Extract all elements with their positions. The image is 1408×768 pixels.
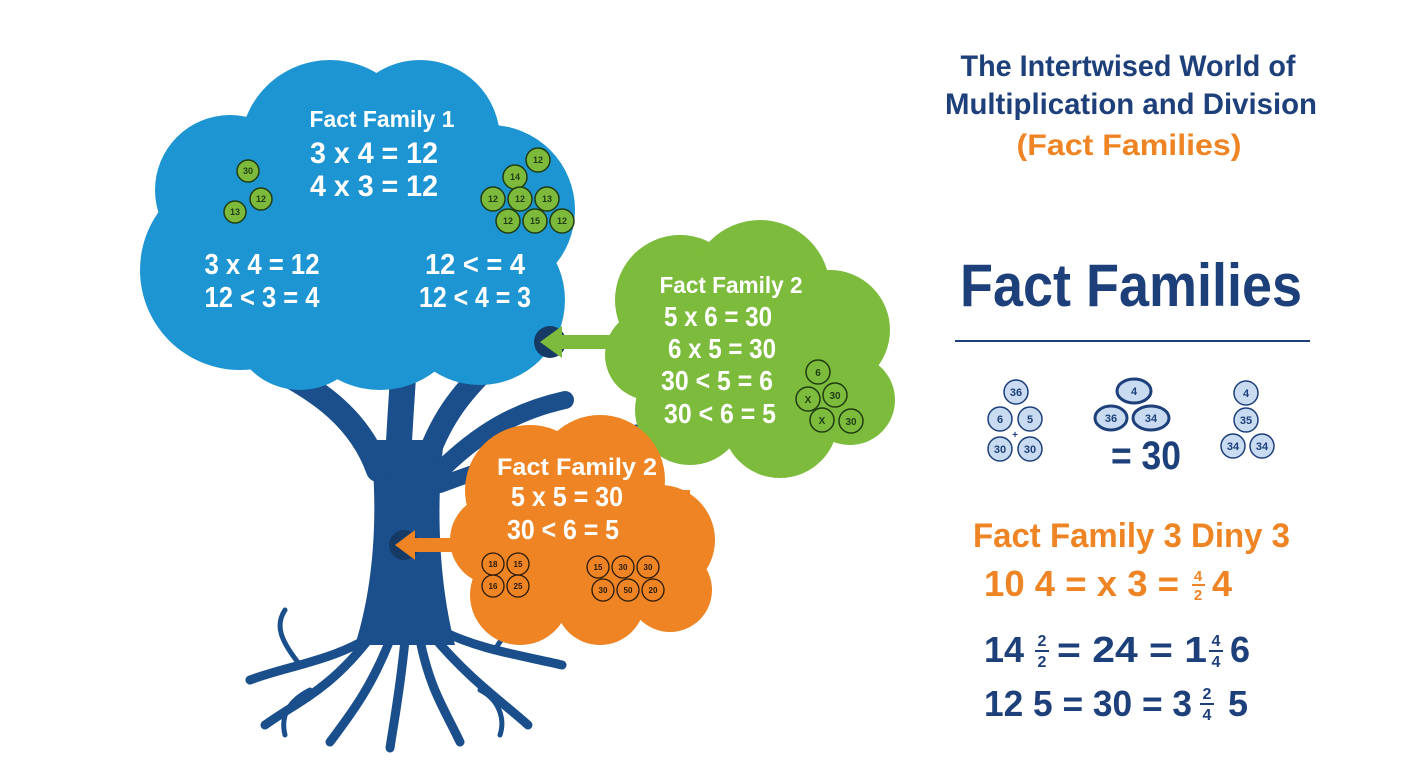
icon: counters orange: 50 bbox=[624, 586, 633, 595]
icon: counter groups: 36 bbox=[1105, 413, 1117, 425]
branches bbox=[268, 360, 640, 485]
equation rows: 2 bbox=[1038, 654, 1047, 671]
icon: counters green cloud bbox=[796, 360, 863, 433]
icon: counters orange: 30 bbox=[644, 563, 653, 572]
icon: counter groups: 34 bbox=[1256, 441, 1269, 453]
icon: green counters right bbox=[481, 148, 574, 233]
icon: counters green cloud: 30 bbox=[829, 391, 841, 402]
text: fact family 2 green: 5 x 6 = 30 bbox=[664, 301, 772, 332]
icon: counters orange: 15 bbox=[594, 563, 603, 572]
text: fact family 2 green: 30 < 5 = 6 bbox=[661, 365, 773, 396]
icon: counter groups: 4 bbox=[1243, 388, 1250, 400]
title bbox=[945, 50, 1317, 162]
text: fact family 1: 3 x 4 = 12 bbox=[204, 249, 320, 281]
cloud: blue fact family 1 bbox=[140, 60, 575, 390]
icon: green counters left: 30 bbox=[243, 166, 253, 176]
icon: counter groups: 6 bbox=[997, 414, 1003, 426]
text: fact family 1: 3 x 4 = 12 bbox=[310, 137, 438, 170]
text: = 30: = 30 bbox=[1111, 434, 1181, 478]
title: (Fact Families) bbox=[1016, 129, 1242, 162]
icon: counter groups: 5 bbox=[1027, 414, 1033, 426]
icon: counter groups: + bbox=[1012, 430, 1018, 441]
icon: counters orange: 18 bbox=[489, 560, 498, 569]
title: The Intertwised World of bbox=[960, 50, 1296, 83]
icon: green counters right: 12 bbox=[533, 155, 543, 165]
roots bbox=[250, 610, 562, 748]
icon: counter groups: 30 bbox=[1024, 444, 1036, 456]
tree bbox=[250, 360, 640, 748]
equation rows: 2 bbox=[1038, 633, 1047, 650]
equation rows: 4 bbox=[1212, 563, 1232, 604]
text: fact family 2 orange: 30 < 6 = 5 bbox=[507, 514, 619, 545]
equation rows: 4 bbox=[1212, 633, 1221, 650]
icon: counters orange: 20 bbox=[649, 586, 658, 595]
icon: counters orange: 30 bbox=[599, 586, 608, 595]
equation rows: = 24 = 1 bbox=[1057, 629, 1207, 670]
equation rows: 2 bbox=[1203, 686, 1212, 703]
text: fact family 2 orange bbox=[497, 454, 657, 545]
equation rows: 4 bbox=[1212, 654, 1221, 671]
equation rows: 5 bbox=[1228, 683, 1248, 724]
icon: green counters left bbox=[224, 160, 272, 223]
icon: green counters left: 13 bbox=[230, 207, 240, 217]
equation rows: 4 bbox=[1194, 568, 1203, 585]
icon: green counters right: 12 bbox=[488, 194, 498, 204]
icon: green counters right: 14 bbox=[510, 172, 520, 182]
icon: counters green cloud: 6 bbox=[815, 368, 821, 379]
icon: counters orange: 16 bbox=[489, 582, 498, 591]
icon: counters green cloud: 30 bbox=[845, 417, 857, 428]
icon: counters orange: 25 bbox=[514, 582, 523, 591]
icon: counters orange: 15 bbox=[514, 560, 523, 569]
icon: counters orange: 30 bbox=[619, 563, 628, 572]
text: fact family 2 green bbox=[660, 272, 802, 429]
icon: counters green cloud: X bbox=[805, 395, 812, 406]
equation rows: 6 bbox=[1230, 629, 1250, 670]
arrow: orange to trunk bbox=[389, 530, 480, 560]
icon: counter groups: 4 bbox=[1131, 386, 1138, 398]
icon: green counters right: 12 bbox=[503, 216, 513, 226]
trunk bbox=[355, 440, 455, 645]
text: fact family 1: 12 < = 4 bbox=[425, 249, 525, 281]
title: Multiplication and Division bbox=[945, 88, 1317, 121]
cloud: green fact family 2 bbox=[605, 220, 895, 478]
equation rows: 14 bbox=[984, 629, 1024, 670]
text: fact family 1: 12 < 3 = 4 bbox=[204, 282, 320, 314]
text: fact family 1 bbox=[204, 106, 531, 314]
text: fact family 2 green: 30 < 6 = 5 bbox=[664, 398, 776, 429]
icon: counters orange bbox=[482, 553, 664, 601]
icon: counter groups: 30 bbox=[994, 444, 1006, 456]
icon: counter groups: 36 bbox=[1010, 387, 1022, 399]
text: fact family 1: 12 < 4 = 3 bbox=[419, 282, 531, 314]
heading: fact families: Fact Families bbox=[960, 252, 1302, 319]
icon: counter groups: 35 bbox=[1240, 415, 1252, 427]
equation rows: 4 bbox=[1203, 707, 1212, 724]
icon: green counters right: 12 bbox=[515, 194, 525, 204]
text: fact family 2 orange: Fact Family 2 bbox=[497, 454, 657, 481]
heading: fact family 3: Fact Family 3 Diny 3 bbox=[973, 517, 1290, 555]
cloud: orange fact family 2 bbox=[450, 415, 715, 645]
icon: counter groups: 34 bbox=[1145, 413, 1158, 425]
icon: green counters right: 12 bbox=[557, 216, 567, 226]
arrow: green to blue cloud bbox=[534, 326, 620, 358]
text: fact family 2 green: Fact Family 2 bbox=[660, 272, 802, 298]
icon: counters green cloud: X bbox=[819, 416, 826, 427]
text: fact family 1: 4 x 3 = 12 bbox=[310, 170, 438, 203]
equation rows: 10 4 = x 3 = bbox=[984, 563, 1179, 604]
equation rows: 12 5 = 30 = 3 bbox=[984, 683, 1192, 724]
icon: counter groups: 34 bbox=[1227, 441, 1240, 453]
icon: green counters left: 12 bbox=[256, 194, 266, 204]
icon: counter groups bbox=[988, 379, 1274, 461]
icon: green counters right: 15 bbox=[530, 216, 540, 226]
equation rows: 2 bbox=[1194, 587, 1202, 604]
icon: green counters right: 13 bbox=[542, 194, 552, 204]
text: fact family 2 green: 6 x 5 = 30 bbox=[668, 333, 776, 364]
equation rows bbox=[984, 563, 1250, 724]
text: fact family 1: Fact Family 1 bbox=[310, 106, 455, 132]
text: fact family 2 orange: 5 x 5 = 30 bbox=[511, 481, 623, 512]
